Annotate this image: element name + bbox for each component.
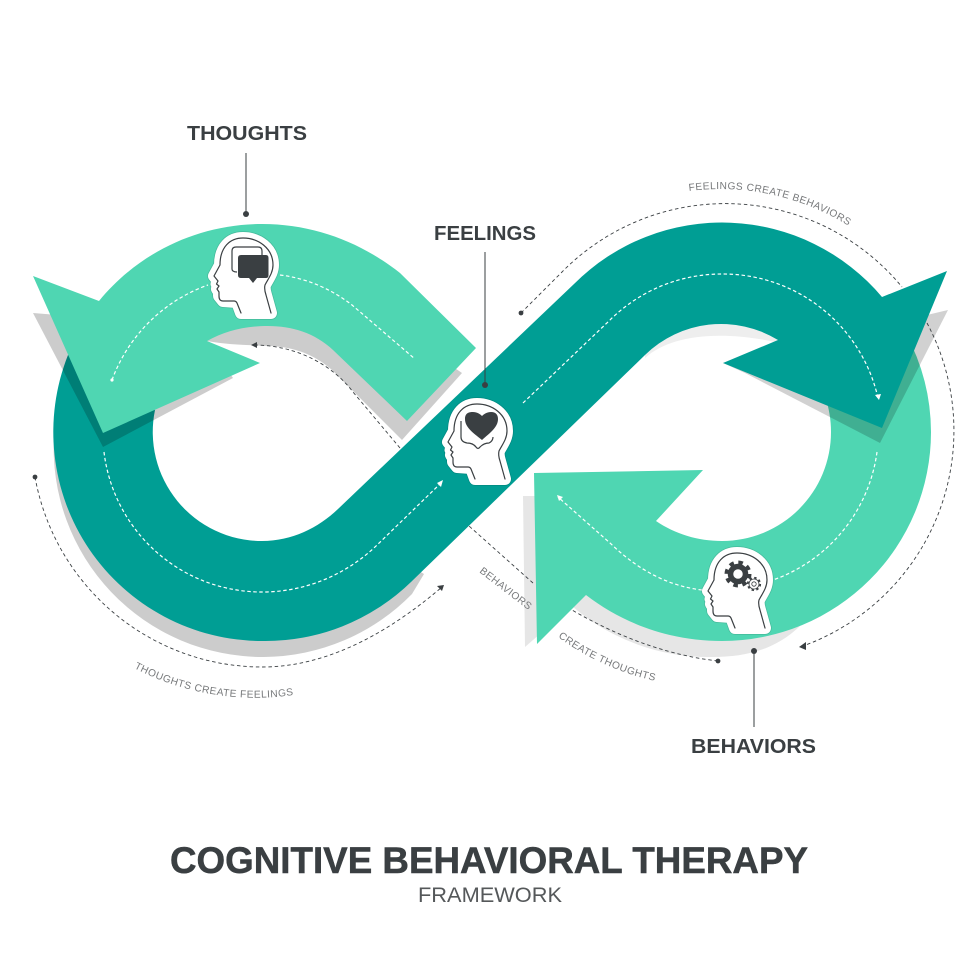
head icon: feelings	[448, 404, 507, 479]
arrow: behaviors create thoughts (light ring, lower right)	[534, 332, 931, 644]
arrow: feelings create behaviors and thoughts create feelings (dark band)	[53, 223, 947, 641]
shadow: dark arm inner curve	[645, 324, 778, 358]
caption: behaviors: BEHAVIORS	[480, 567, 532, 609]
icon: heart with brain outline	[461, 412, 498, 448]
flow path: white dashes on dark band lower loop	[104, 452, 443, 592]
subtitle: FRAMEWORK	[418, 884, 562, 907]
shadow: light upper arrow	[33, 300, 462, 447]
flow path: white dashes on light ring	[557, 452, 877, 590]
icon: speech bubbles	[232, 247, 268, 283]
dotted arc: behaviors create thoughts	[251, 342, 720, 663]
label: behaviors: BEHAVIORS	[691, 736, 816, 758]
flow path: white dashes on dark band upper arm	[523, 274, 881, 403]
curved caption: feelings create behaviors: FEELINGS CREATE BEHAVIORS	[689, 182, 851, 225]
label: thoughts: THOUGHTS	[187, 123, 307, 145]
label: behaviors	[691, 648, 816, 758]
caption: create thoughts: CREATE THOUGHTS	[560, 632, 656, 680]
shadow: dark band lower left	[54, 432, 424, 657]
arrow: behaviors create thoughts (light upper arrow)	[33, 224, 476, 433]
shadow: light lower arrow	[523, 496, 800, 657]
icon: gears	[726, 562, 760, 590]
head icon: behaviors	[708, 553, 767, 628]
dotted arc: thoughts create feelings	[33, 475, 444, 667]
shadow: dark arrow head	[723, 310, 948, 443]
dotted arc: feelings create behaviors	[519, 204, 954, 650]
label: feelings	[434, 223, 536, 388]
title: COGNITIVE BEHAVIORAL THERAPY	[170, 840, 808, 881]
label: feelings: FEELINGS	[434, 223, 536, 245]
label: thoughts	[187, 123, 307, 217]
head icon: thoughts	[214, 238, 273, 313]
curved caption: thoughts create feelings: THOUGHTS CREATE FEELINGS	[136, 662, 293, 698]
flow path: white dashes on upper arrow	[110, 275, 415, 382]
